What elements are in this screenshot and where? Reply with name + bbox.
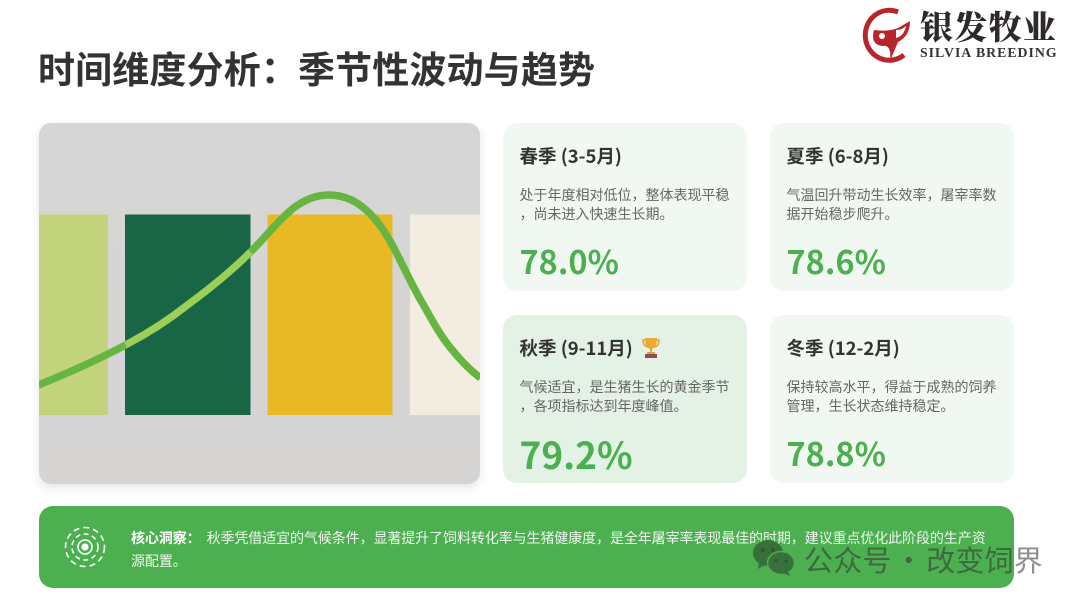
icon: trophy: [642, 338, 660, 358]
bar: summer: [124, 214, 250, 415]
title: 时间维度分析：季节性波动与趋势: [38, 40, 595, 94]
insight text: [131, 528, 986, 570]
icon: wechat: [753, 540, 794, 576]
logo subtitle: SILVIA BREEDING: [920, 45, 1058, 60]
value: 78.0%: [520, 237, 619, 284]
value: 79.2%: [520, 426, 633, 480]
panel: winter: [770, 315, 1014, 483]
description: 气温回升带动生长效率，屠宰率数: [786, 185, 996, 205]
description: 管理，生长状态维持稳定。: [786, 396, 954, 416]
description: ，各项指标达到年度峰值。: [520, 396, 688, 416]
icon: logo ring: [862, 8, 910, 63]
trend curve: [38, 195, 480, 385]
bar: spring: [38, 214, 108, 415]
watermark: WeChat official account: [753, 538, 1043, 580]
watermark text: 公众号 · 改变饲界: [804, 538, 1043, 580]
description: 处于年度相对低位，整体表现平稳: [520, 185, 730, 205]
bar: autumn: [267, 214, 392, 415]
bar: winter: [410, 214, 480, 415]
logo: Silvia Breeding: [862, 2, 1058, 63]
panel: autumn: [502, 315, 746, 483]
icon: target: [64, 526, 106, 568]
description: 保持较高水平，得益于成熟的饲养: [786, 377, 996, 397]
insight text: 源配置。: [131, 550, 187, 570]
value: 78.8%: [786, 429, 886, 476]
panel: summer: [770, 123, 1014, 291]
insight text: 核心洞察： 秋季凭借适宜的气候条件，显著提升了饲料转化率与生猪健康度，是全年屠宰率表现最佳的时期，建议重点优化此阶段的生产资: [131, 528, 986, 548]
description: [520, 185, 730, 224]
heading: 夏季 (6-8月): [786, 143, 889, 169]
logo name: 银发牧业: [920, 2, 1057, 49]
description: [786, 377, 996, 416]
description: [786, 185, 996, 224]
panel: spring: [502, 123, 746, 291]
description: ，尚未进入快速生长期。: [520, 204, 674, 224]
description: 据开始稳步爬升。: [786, 204, 898, 224]
chart illustration: seasonal curve: [38, 123, 480, 484]
heading: 冬季 (12-2月): [786, 335, 900, 361]
callout: core insight: [38, 506, 1014, 588]
description: 气候适宜，是生猪生长的黄金季节: [520, 377, 730, 397]
heading: 秋季 (9-11月): [520, 335, 633, 361]
description: [520, 377, 730, 416]
value: 78.6%: [786, 237, 886, 284]
heading: 春季 (3-5月): [520, 143, 622, 169]
